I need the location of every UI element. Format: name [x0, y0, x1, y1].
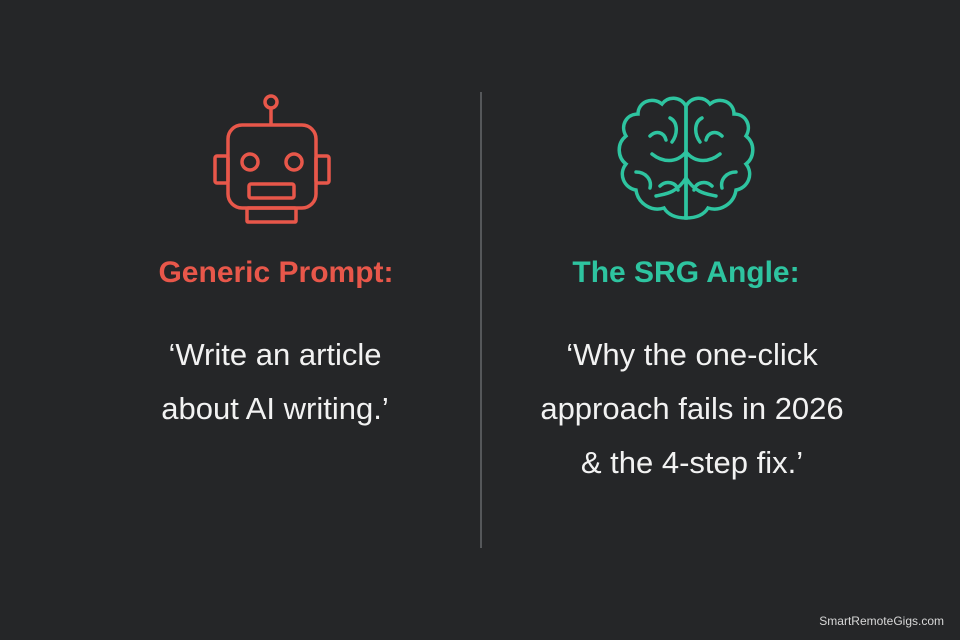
text: generic quote: about AI writing.’ — [161, 391, 389, 426]
text: SRG quote: approach fails in 2026 — [540, 391, 844, 426]
text: generic quote: ‘Write an article — [168, 337, 382, 372]
text: SRG quote: ‘Why the one-click — [566, 337, 818, 372]
watermark: SmartRemoteGigs.com — [819, 614, 944, 628]
icon: robot — [213, 94, 331, 224]
text: SRG quote — [540, 337, 844, 480]
text: SRG quote: & the 4-step fix.’ — [581, 445, 803, 480]
text: generic quote — [161, 337, 389, 426]
heading: SRG angle: The SRG Angle: — [572, 256, 800, 289]
heading: generic prompt: Generic Prompt: — [158, 256, 394, 289]
divider — [480, 92, 482, 548]
icon: brain — [618, 96, 754, 220]
